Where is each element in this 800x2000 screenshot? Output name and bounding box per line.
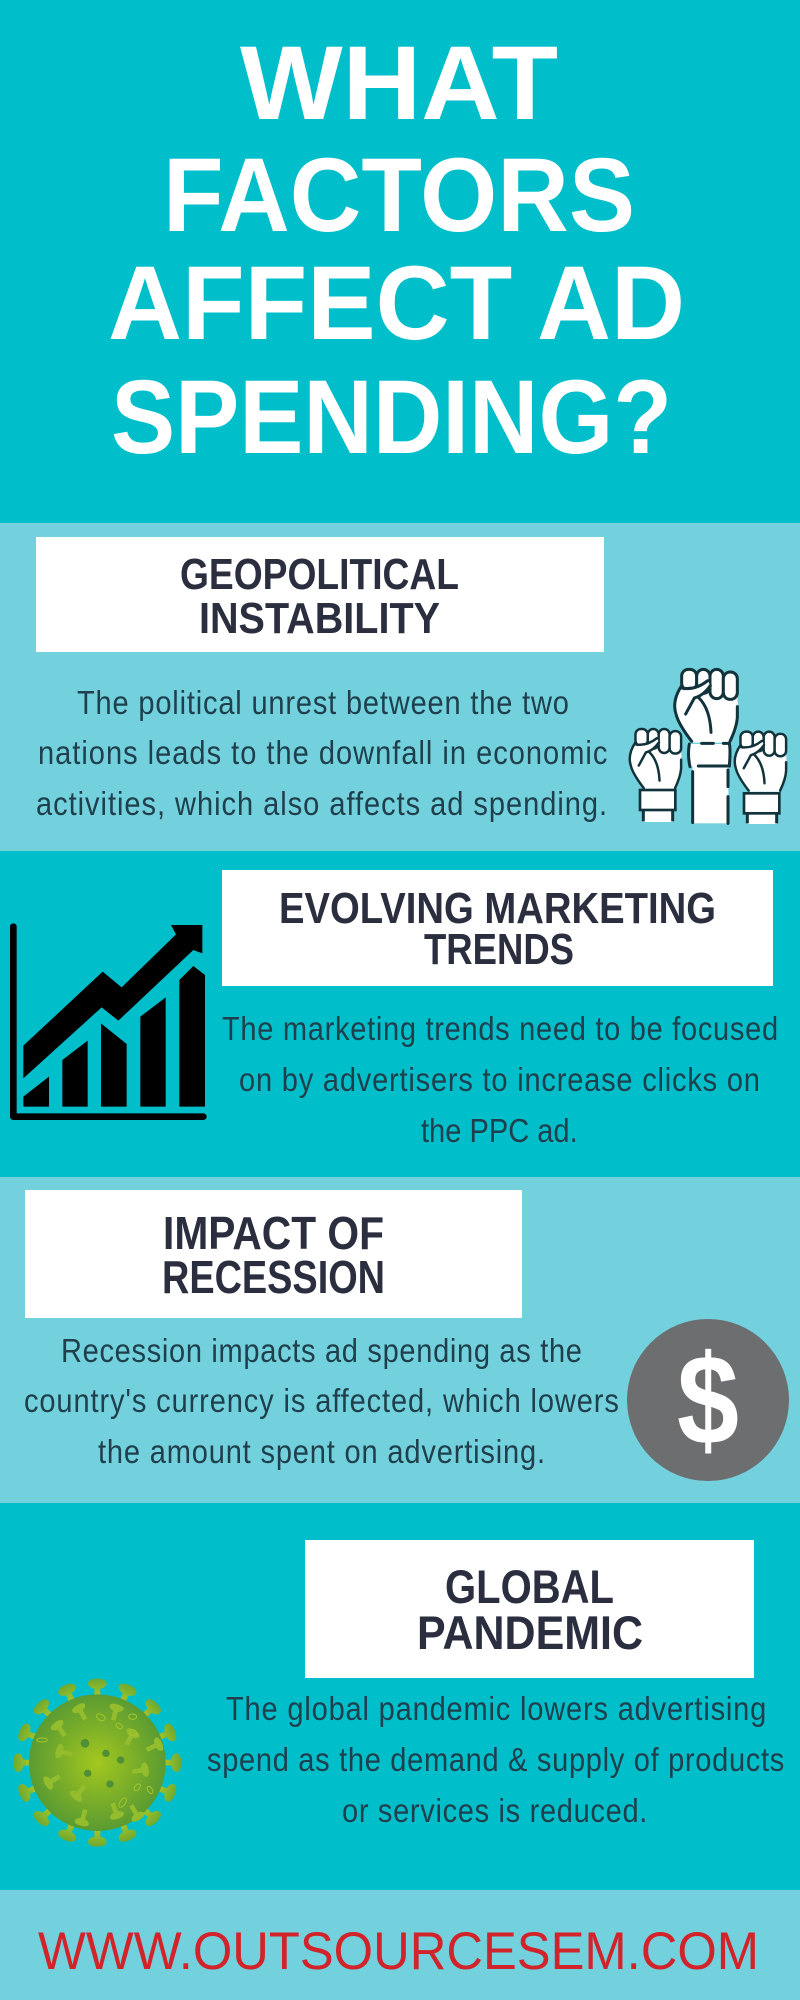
text: recession body [24,1332,619,1470]
heading: global pandemic: GLOBAL [445,1560,614,1613]
text: geopolitical body [36,684,607,822]
panel: impact of recession [0,1177,800,1503]
heading: impact of recession [25,1190,522,1318]
heading: geopolitical instability: GEOPOLITICAL [180,550,459,599]
heading: impact of recession: RECESSION [162,1251,385,1303]
title [108,25,685,476]
text: pandemic body [207,1690,784,1829]
text: pandemic body: spend as the demand & supply of products [207,1741,784,1778]
panel: global pandemic [13,1540,784,1847]
heading: geopolitical instability: INSTABILITY [199,594,440,643]
text: recession body: country's currency is affected, which lowers [24,1382,619,1419]
panel: footer url [0,1890,800,2000]
text: geopolitical body: The political unrest between the two [77,684,569,721]
title: SPENDING? [111,359,672,476]
panel: evolving marketing trends [13,870,778,1149]
heading: global pandemic: PANDEMIC [417,1606,643,1659]
title: FACTORS [163,137,635,254]
icon: dollar coin: $ [677,1329,739,1472]
text: trends body: the PPC ad. [421,1112,578,1149]
panel: geopolitical instability [0,523,800,851]
heading: evolving marketing trends [222,870,773,986]
heading: evolving marketing trends: TRENDS [424,925,574,974]
icon: raised fists [630,669,786,824]
heading: evolving marketing trends: EVOLVING MARKETING [279,884,716,933]
text: geopolitical body: nations leads to the downfall in economic [38,734,607,771]
text: recession body: Recession impacts ad spending as the [61,1332,582,1369]
text: trends body: on by advertisers to increase clicks on [239,1061,760,1098]
heading: geopolitical instability [36,537,604,652]
icon: virus [13,1679,181,1847]
text: geopolitical body: activities, which also affects ad spending. [36,785,607,822]
title: WHAT [240,25,558,142]
text: pandemic body: or services is reduced. [342,1792,647,1829]
heading: global pandemic [305,1540,754,1678]
heading: impact of recession: IMPACT OF [163,1207,384,1259]
text: trends body [222,1010,778,1149]
text: pandemic body: The global pandemic lowers advertising [226,1690,766,1727]
footer website: WWW.OUTSOURCESEM.COM [38,1922,759,1981]
title: AFFECT AD [108,245,685,362]
icon: rising bar chart with arrow [13,925,205,1117]
text: trends body: The marketing trends need to be focused [222,1010,778,1047]
icon: dollar coin [627,1319,789,1481]
text: recession body: the amount spent on advertising. [98,1433,545,1470]
